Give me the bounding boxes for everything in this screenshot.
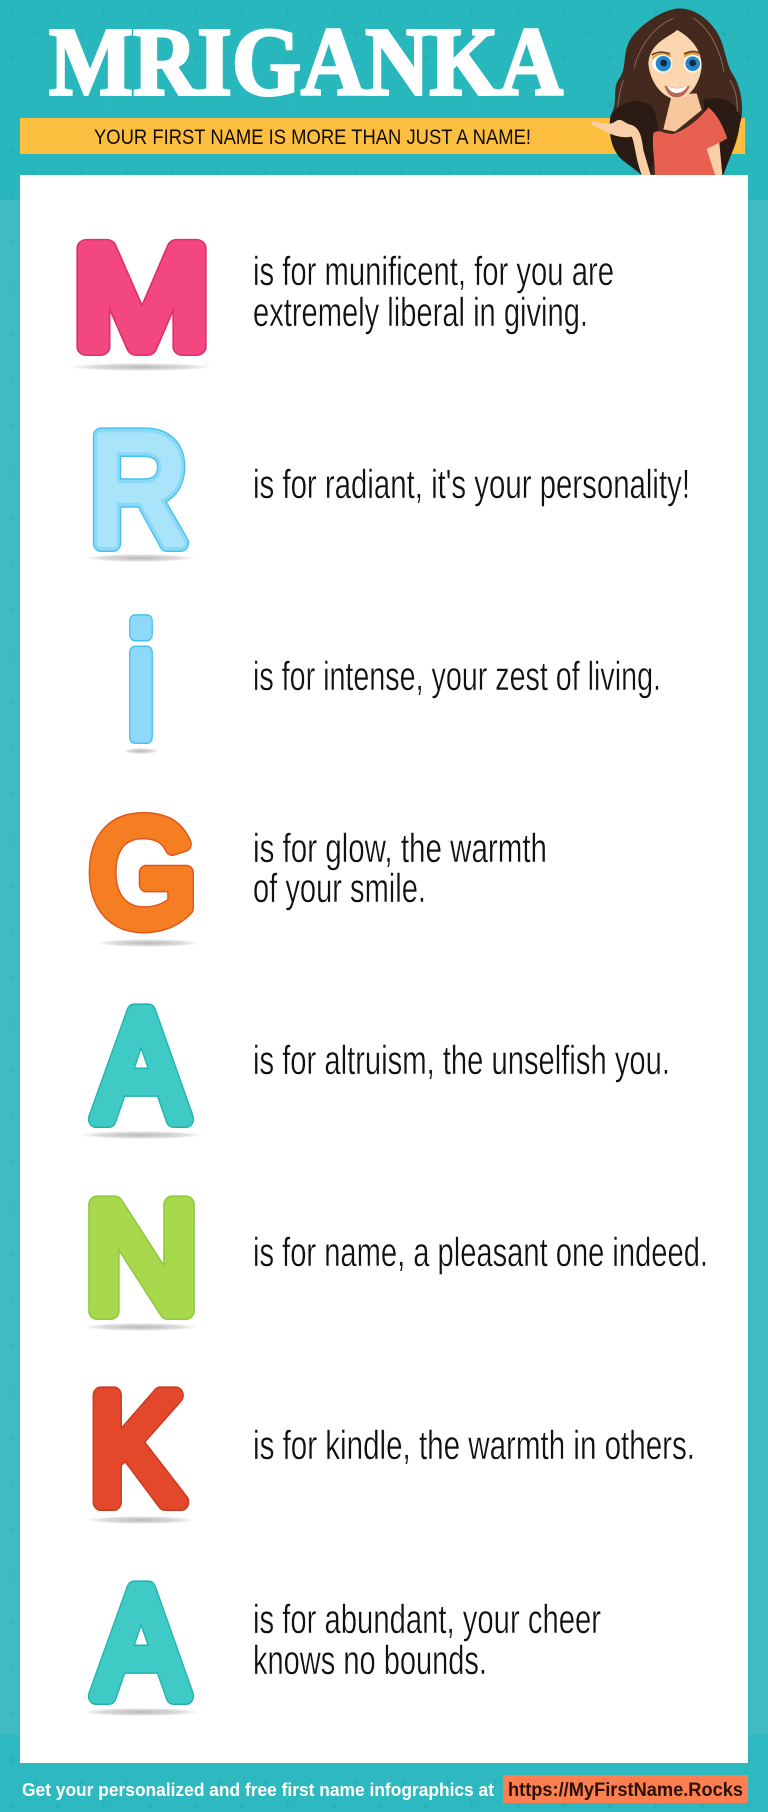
- row: A: [79, 979, 670, 1152]
- icon: letter N: N: [84, 1171, 199, 1345]
- row: K: [86, 1363, 695, 1536]
- row: N: [83, 1171, 708, 1345]
- icon: second letter A: A: [96, 1556, 187, 1729]
- icon: letter R: R: [90, 403, 187, 576]
- footer url badge: https://MyFirstName.Rocks: [508, 1780, 743, 1801]
- text: G lines: is for glow, the warmth: [253, 825, 547, 871]
- icon: letter K: K: [89, 1363, 183, 1536]
- icon: letter N: N: [84, 1171, 199, 1345]
- row: M: [69, 216, 614, 378]
- text: M line: [253, 248, 614, 335]
- icon: letter i: i: [126, 594, 156, 771]
- row: G: [89, 790, 547, 956]
- icon: letter A: A: [96, 979, 187, 1152]
- icon: letter M: M: [73, 216, 210, 378]
- text: M line: is for munificent, for you are: [253, 248, 614, 294]
- row: R: [84, 403, 690, 576]
- text: second A lines: is for abundant, your cheer: [253, 1596, 601, 1642]
- icon: letter R: R: [90, 403, 187, 576]
- icon: letter M: M: [73, 216, 210, 378]
- icon: letter G: G: [89, 790, 197, 956]
- icon: cartoon woman: [591, 8, 742, 175]
- icon: letter R: R: [90, 403, 187, 576]
- icon: second letter A: A: [96, 1556, 187, 1729]
- tagline banner: [20, 118, 745, 154]
- text: second A lines: knows no bounds.: [253, 1637, 487, 1683]
- row: I: [123, 594, 661, 771]
- icon: letter K: K: [89, 1363, 183, 1536]
- text: second A lines: [253, 1596, 601, 1683]
- icon: letter G: G: [89, 790, 197, 956]
- icon: letter i: i: [126, 594, 156, 771]
- row: A (second): [81, 1556, 601, 1729]
- text: G lines: of your smile.: [253, 865, 426, 911]
- tagline banner: YOUR FIRST NAME IS MORE THAN JUST A NAME!: [94, 126, 531, 149]
- icon: letter A: A: [96, 979, 187, 1152]
- title: MRIGANKA: [49, 8, 563, 116]
- text: M line: extremely liberal in giving.: [253, 289, 588, 335]
- footer call to action: Get your personalized and free first name infographics at: [22, 1780, 494, 1800]
- text: G lines: [253, 825, 547, 911]
